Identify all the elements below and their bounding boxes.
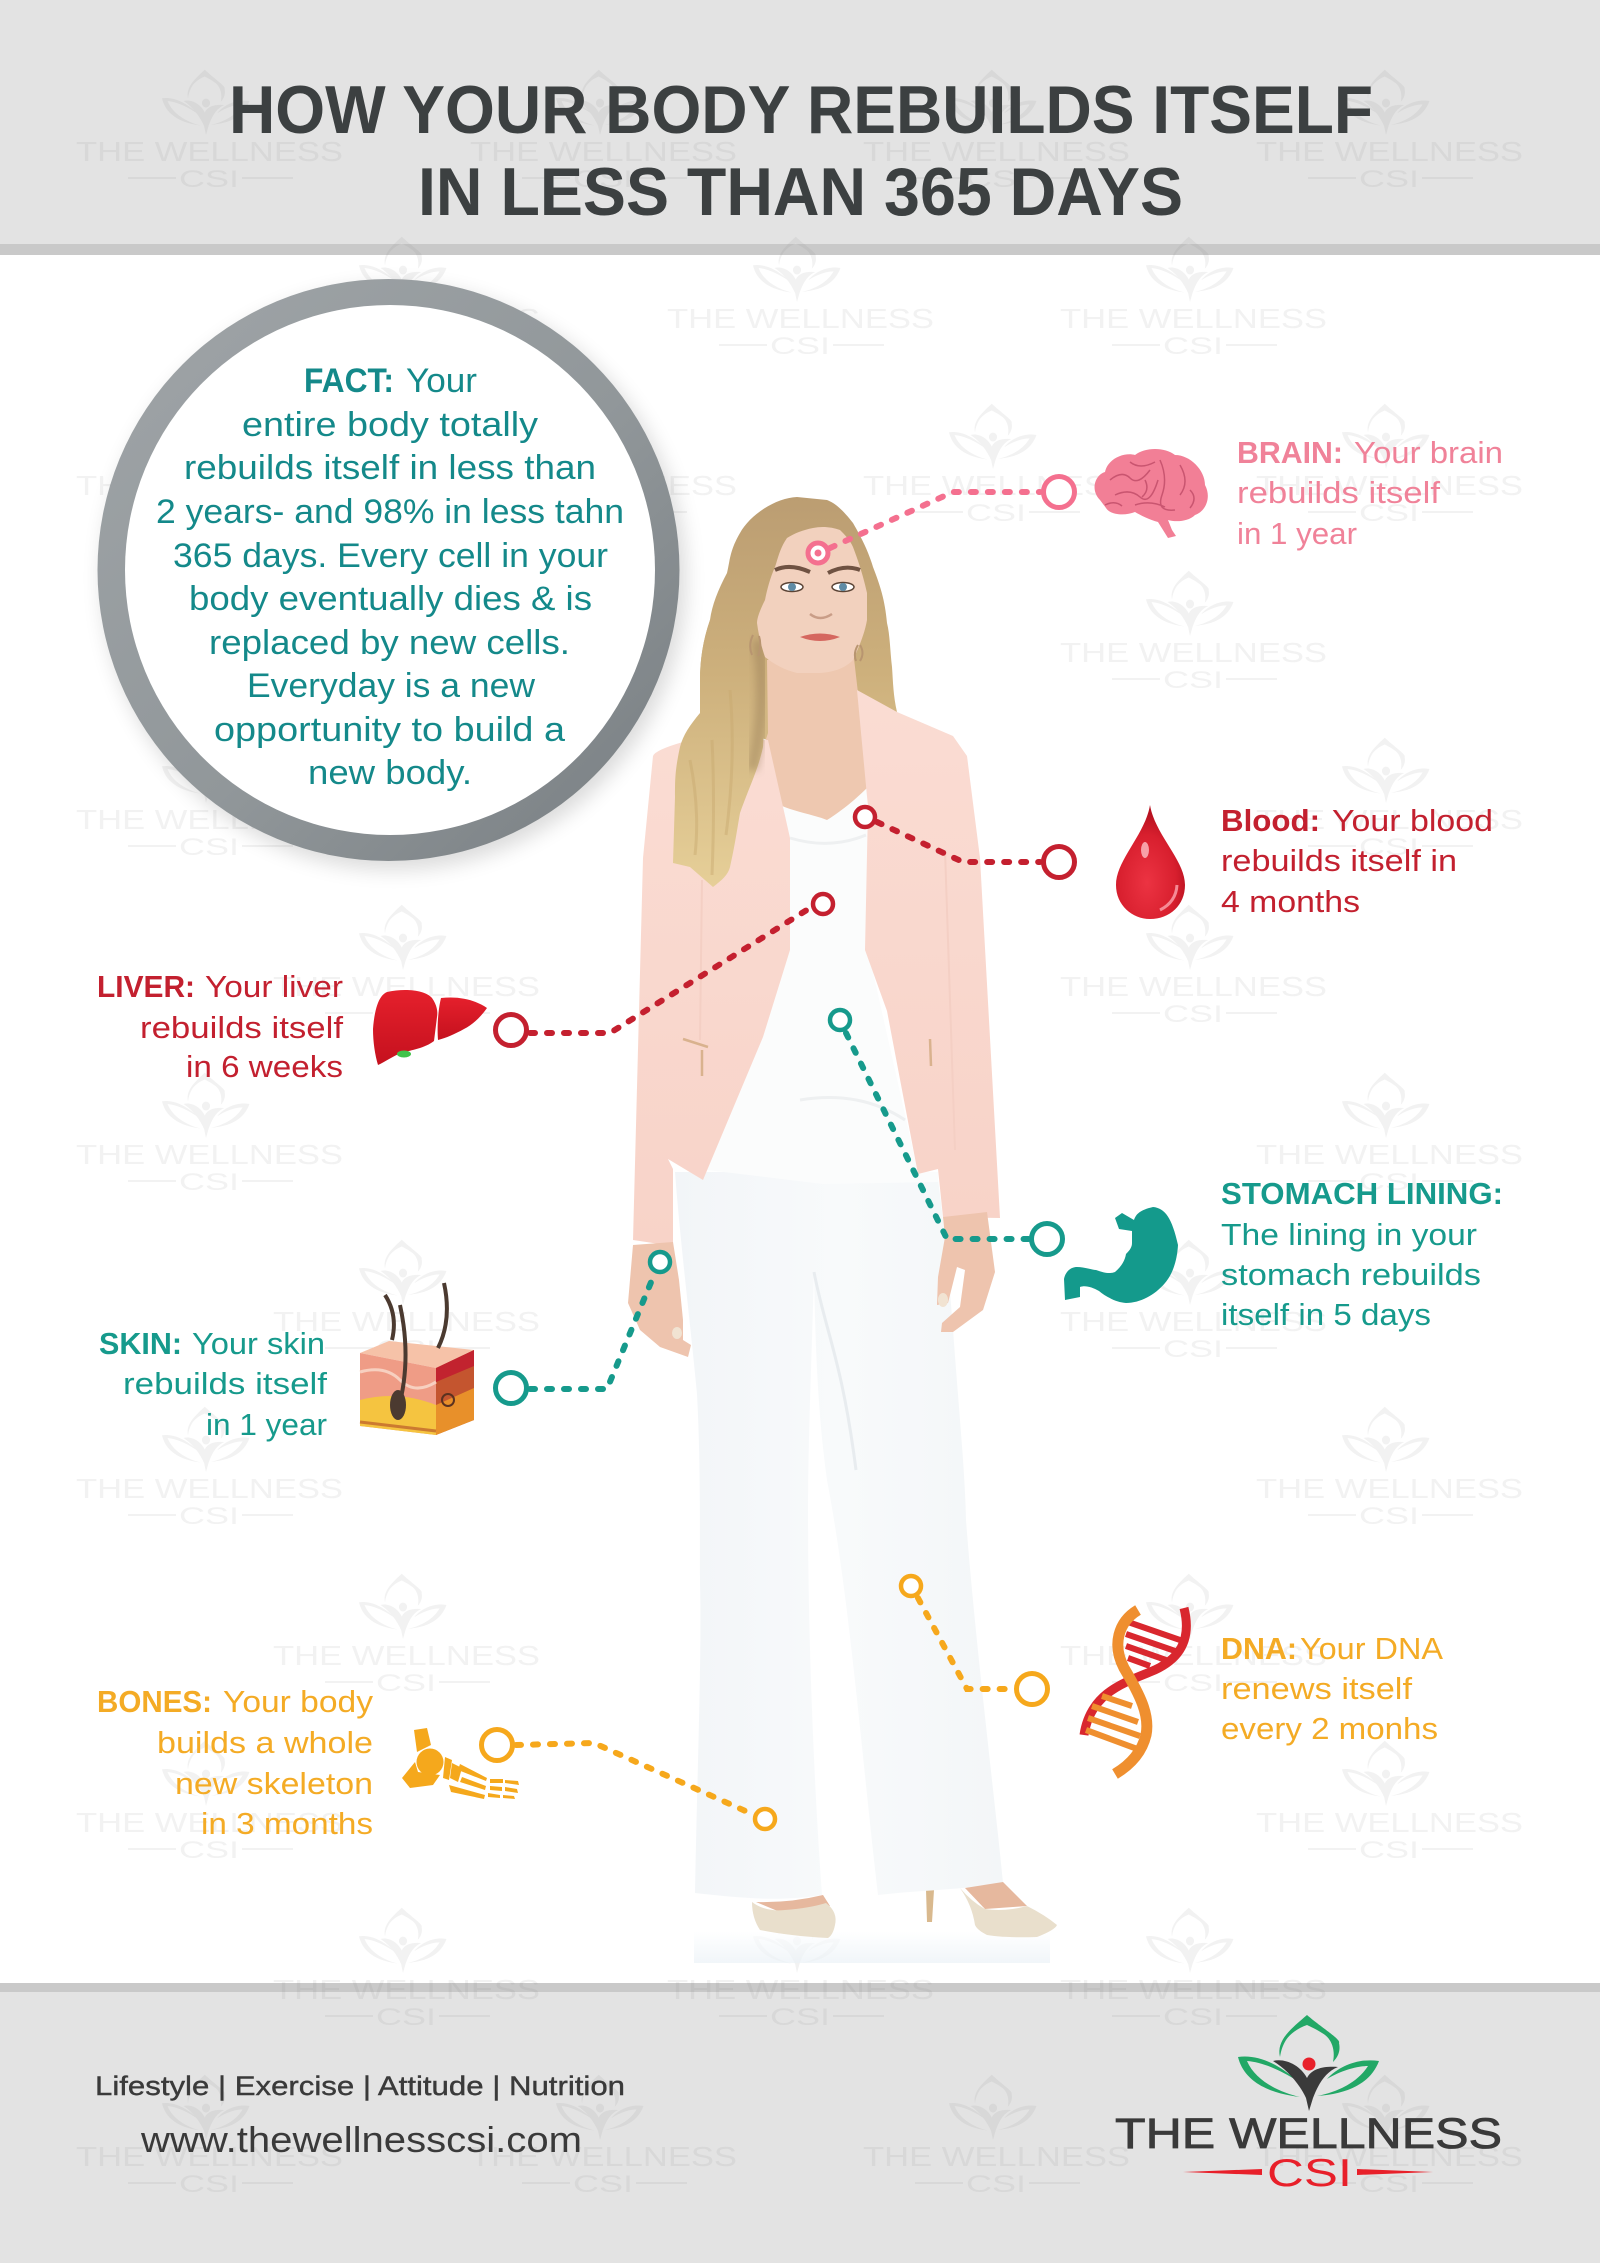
logo csi: CSI <box>1267 2152 1352 2195</box>
watermark pattern: CSI <box>1163 1336 1223 1363</box>
connector: blood <box>855 807 1074 878</box>
watermark pattern: CSI <box>1359 1837 1419 1864</box>
watermark pattern: CSI <box>1163 1001 1223 1028</box>
label: liver: rebuilds itself <box>140 1010 343 1045</box>
title <box>229 72 1373 230</box>
watermark pattern: THE WELLNESS <box>76 804 343 835</box>
watermark pattern: CSI <box>1359 166 1419 193</box>
watermark pattern: THE WELLNESS <box>273 971 540 1002</box>
watermark pattern: THE WELLNESS <box>273 1306 540 1337</box>
icon: blood drop <box>1116 805 1185 919</box>
label: blood: Your blood <box>1332 803 1493 838</box>
left shoe <box>752 1895 836 1938</box>
watermark pattern: THE WELLNESS <box>1256 1139 1523 1170</box>
label: blood: 4 months <box>1221 884 1360 919</box>
label: liver <box>97 969 343 1084</box>
watermark pattern: THE WELLNESS <box>76 1473 343 1504</box>
hair back <box>700 497 897 740</box>
icon: brain <box>1095 449 1208 538</box>
label: stomach lining: itself in 5 days <box>1221 1297 1431 1332</box>
label: bones: in 3 months <box>201 1806 373 1841</box>
connector: skin <box>496 1252 670 1404</box>
watermark pattern: THE WELLNESS <box>273 1974 540 2005</box>
fact text: 365 days. Every cell in your <box>173 537 608 575</box>
label: bones: Your body <box>223 1684 374 1719</box>
title: HOW YOUR BODY REBUILDS ITSELF <box>229 72 1373 148</box>
left hand <box>628 1242 691 1357</box>
panel: fact circle <box>98 279 686 870</box>
icon: skin <box>360 1283 474 1435</box>
right hand <box>937 1212 995 1332</box>
connector: stomach <box>830 1010 1062 1254</box>
watermark pattern: THE WELLNESS <box>76 136 343 167</box>
label: skin <box>99 1326 327 1442</box>
watermark pattern: CSI <box>1359 500 1419 527</box>
watermark pattern: THE WELLNESS <box>1256 136 1523 167</box>
woman figure <box>628 497 1057 1938</box>
connector: bones <box>482 1730 775 1829</box>
watermark pattern: THE WELLNESS <box>76 1807 343 1838</box>
logo <box>1115 2015 1502 2195</box>
watermark pattern: CSI <box>179 1169 239 1196</box>
jacket left <box>633 740 790 1246</box>
fact text: 2 years- and 98% in less tahn <box>156 493 624 531</box>
watermark pattern: THE WELLNESS <box>863 136 1130 167</box>
watermark pattern: THE WELLNESS <box>1256 1807 1523 1838</box>
logo wordmark: THE WELLNESS <box>1115 2110 1502 2158</box>
label: stomach lining: STOMACH LINING: <box>1221 1176 1503 1211</box>
watermark pattern: THE WELLNESS <box>76 2141 343 2172</box>
watermark pattern: CSI <box>179 166 239 193</box>
label: skin: SKIN: <box>99 1326 182 1361</box>
watermark pattern: THE WELLNESS <box>1060 303 1327 334</box>
label: brain <box>1237 435 1503 551</box>
watermark pattern: CSI <box>179 1503 239 1530</box>
watermark pattern: CSI <box>770 2004 830 2031</box>
label: liver: in 6 weeks <box>186 1049 343 1084</box>
label: liver: Your liver <box>205 969 343 1004</box>
logo icon <box>1238 2015 1379 2111</box>
watermark pattern: CSI <box>1359 834 1419 861</box>
floor reflection <box>694 1930 1050 1963</box>
watermark pattern: CSI <box>966 500 1026 527</box>
watermark pattern: THE WELLNESS <box>863 2141 1130 2172</box>
fact text: Everyday is a new <box>247 667 535 705</box>
watermark pattern: THE WELLNESS <box>470 2141 737 2172</box>
watermark pattern: CSI <box>376 1670 436 1697</box>
pants <box>675 1172 1003 1899</box>
label: brain: Your brain <box>1354 435 1503 470</box>
watermark pattern: CSI <box>1163 1670 1223 1697</box>
label: dna <box>1221 1631 1443 1746</box>
watermark pattern: THE WELLNESS <box>667 1974 934 2005</box>
icon: bones foot <box>402 1728 519 1799</box>
footer website: www.thewellnesscsi.com <box>140 2119 582 2160</box>
watermark pattern: CSI <box>179 834 239 861</box>
watermark pattern: THE WELLNESS <box>1060 637 1327 668</box>
watermark pattern: CSI <box>179 500 239 527</box>
jacket zippers <box>683 1039 931 1076</box>
watermark pattern: THE WELLNESS <box>863 470 1130 501</box>
label: bones: builds a whole <box>157 1725 373 1760</box>
watermark pattern: THE WELLNESS <box>1060 1306 1327 1337</box>
label: blood: Blood: <box>1221 803 1320 838</box>
fact text: entire body totally <box>242 406 538 444</box>
label: bones <box>97 1684 374 1841</box>
label: liver: LIVER: <box>97 969 195 1004</box>
white top <box>707 788 938 1184</box>
right shoe <box>960 1882 1057 1937</box>
watermark pattern: THE WELLNESS <box>273 1640 540 1671</box>
watermark pattern: CSI <box>573 500 633 527</box>
watermark pattern: THE WELLNESS <box>470 136 737 167</box>
label: brain: BRAIN: <box>1237 435 1343 470</box>
icon: liver <box>373 990 487 1065</box>
connector: dna <box>901 1576 1048 1704</box>
watermark pattern: THE WELLNESS <box>76 470 343 501</box>
face <box>750 527 867 673</box>
watermark pattern: THE WELLNESS <box>76 1139 343 1170</box>
label: blood: rebuilds itself in <box>1221 843 1457 878</box>
icon: dna <box>1084 1608 1186 1774</box>
fact text: new body. <box>308 754 472 792</box>
label: dna: Your DNA <box>1300 1631 1443 1666</box>
watermark pattern: THE WELLNESS <box>1060 971 1327 1002</box>
label: skin: rebuilds itself <box>123 1366 327 1401</box>
watermark pattern: CSI <box>1359 2171 1419 2198</box>
label: stomach lining <box>1221 1176 1503 1332</box>
watermark pattern: CSI <box>376 2004 436 2031</box>
fact text: opportunity to build a <box>214 711 565 749</box>
fact text: rebuilds itself in less than <box>184 449 596 487</box>
watermark pattern: CSI <box>1163 333 1223 360</box>
fact text: Your <box>406 362 477 400</box>
watermark pattern: CSI <box>376 1001 436 1028</box>
watermark pattern: THE WELLNESS <box>1060 1640 1327 1671</box>
watermark pattern: THE WELLNESS <box>1256 1473 1523 1504</box>
label: dna: DNA: <box>1221 1631 1297 1666</box>
neck and chest <box>764 650 869 822</box>
label: stomach lining: stomach rebuilds <box>1221 1257 1481 1292</box>
label: skin: Your skin <box>192 1326 325 1361</box>
watermark pattern: THE WELLNESS <box>1256 2141 1523 2172</box>
fact text: body eventually dies & is <box>189 580 592 618</box>
watermark pattern: THE WELLNESS <box>1060 1974 1327 2005</box>
connector: brain <box>808 476 1074 563</box>
icon: stomach <box>1064 1207 1178 1303</box>
right shoe heel <box>926 1890 934 1922</box>
watermark pattern: CSI <box>179 2171 239 2198</box>
jacket right <box>857 690 1000 1218</box>
watermark pattern: CSI <box>376 1336 436 1363</box>
connector: liver <box>496 894 833 1046</box>
watermark pattern: CSI <box>966 2171 1026 2198</box>
fact text: replaced by new cells. <box>209 624 570 662</box>
watermark pattern: CSI <box>1359 1503 1419 1530</box>
label: bones: BONES: <box>97 1684 212 1719</box>
watermark pattern: CSI <box>573 166 633 193</box>
watermark pattern: CSI <box>966 166 1026 193</box>
watermark pattern: CSI <box>770 333 830 360</box>
watermark pattern: THE WELLNESS <box>667 303 934 334</box>
title: IN LESS THAN 365 DAYS <box>418 154 1183 230</box>
label: stomach lining: The lining in your <box>1221 1217 1477 1252</box>
logo csi <box>1183 2152 1433 2195</box>
label: brain: in 1 year <box>1237 516 1357 551</box>
watermark pattern: THE WELLNESS <box>273 303 540 334</box>
watermark pattern: CSI <box>179 1837 239 1864</box>
footer band <box>0 1983 1600 2263</box>
watermark pattern: CSI <box>376 333 436 360</box>
watermark pattern: THE WELLNESS <box>1256 804 1523 835</box>
watermark pattern: CSI <box>1163 667 1223 694</box>
watermark pattern: CSI <box>1163 2004 1223 2031</box>
label: blood <box>1221 803 1493 919</box>
watermark pattern: CSI <box>573 2171 633 2198</box>
label: brain: rebuilds itself <box>1237 475 1440 510</box>
fact text <box>156 362 624 792</box>
hair over shoulder <box>673 620 767 887</box>
label: bones: new skeleton <box>175 1766 373 1801</box>
watermark pattern: THE WELLNESS <box>470 470 737 501</box>
label: skin: in 1 year <box>206 1407 327 1442</box>
footer tagline: Lifestyle | Exercise | Attitude | Nutrition <box>95 2071 625 2101</box>
header band <box>0 0 1600 255</box>
fact text: FACT: <box>304 362 394 400</box>
watermark pattern: CSI <box>1359 1169 1419 1196</box>
watermark pattern: THE WELLNESS <box>1256 470 1523 501</box>
label: dna: every 2 monhs <box>1221 1711 1438 1746</box>
label: dna: renews itself <box>1221 1671 1412 1706</box>
